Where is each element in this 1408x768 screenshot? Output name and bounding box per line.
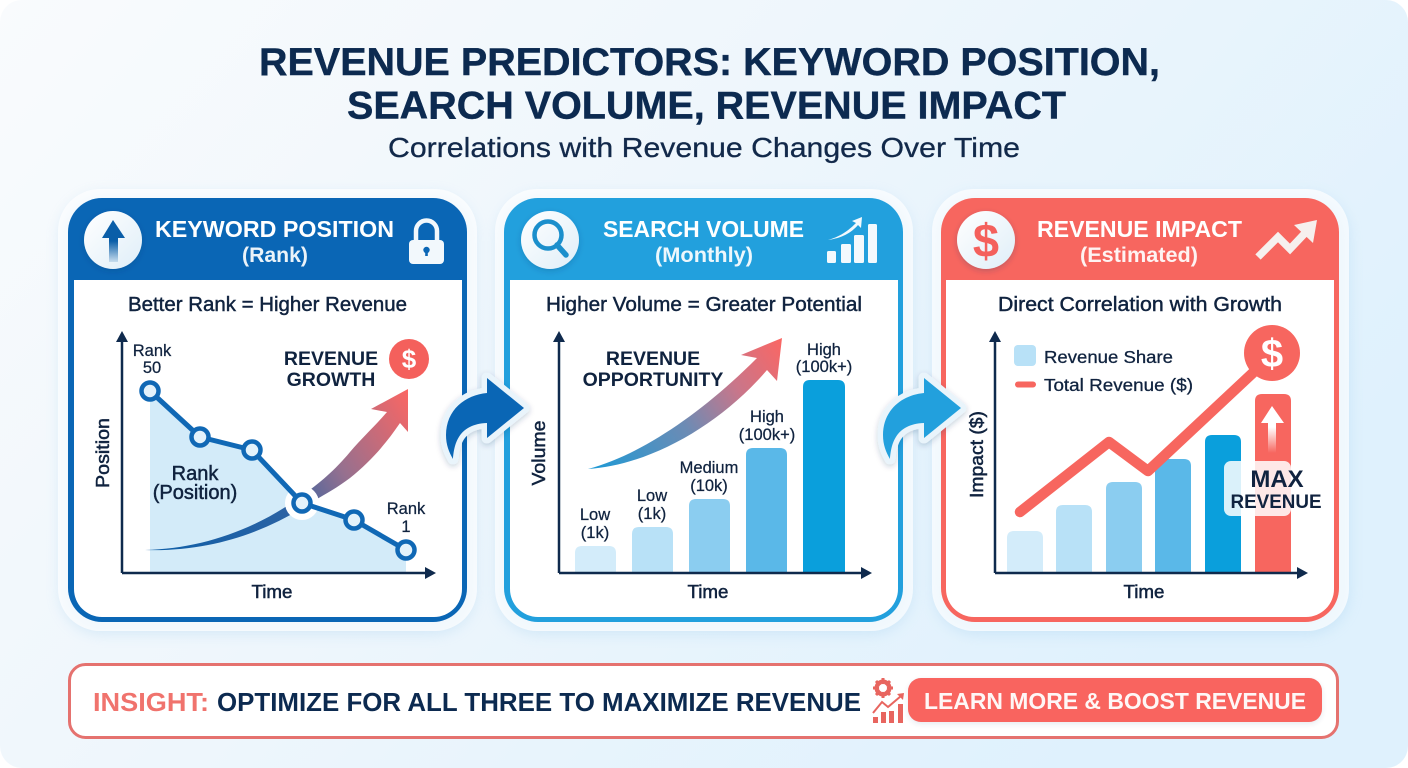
legend bbox=[1014, 345, 1193, 395]
label: rank 1: 1 bbox=[401, 518, 411, 536]
heading: search volume: SEARCH VOLUME bbox=[603, 216, 804, 242]
axis label: time: Time bbox=[252, 582, 292, 602]
callout: max revenue: REVENUE bbox=[1230, 492, 1322, 513]
axis label: time: Time bbox=[1124, 582, 1164, 602]
bar chart: revenue share bbox=[989, 331, 1308, 579]
panel statement: Better Rank = Higher Revenue bbox=[128, 294, 407, 316]
axis label: impact: Impact ($) bbox=[967, 411, 987, 498]
axis label: position: Position bbox=[93, 418, 113, 488]
icon: dollar coin: $ bbox=[1261, 332, 1283, 376]
legend: Total Revenue ($) bbox=[1044, 375, 1193, 395]
axis label: volume: Volume bbox=[529, 420, 549, 486]
panel: keyword position bbox=[58, 189, 477, 634]
bar label 2: Low bbox=[637, 487, 667, 505]
heading: revenue impact: (Estimated) bbox=[1080, 244, 1198, 267]
panel statement: Direct Correlation with Growth bbox=[998, 294, 1282, 316]
insight text: INSIGHT: bbox=[93, 689, 209, 717]
icon: trend arrow bbox=[1258, 220, 1317, 257]
bar label 4: (100k+) bbox=[739, 426, 795, 444]
heading: revenue impact bbox=[1037, 216, 1242, 267]
icon: gear and growth chart bbox=[873, 678, 904, 723]
label: rank 1: Rank bbox=[387, 500, 426, 518]
callout: max revenue: MAX bbox=[1250, 466, 1304, 493]
title bbox=[259, 41, 1160, 128]
arrow: revenue opportunity bbox=[588, 338, 782, 469]
label: rank position: (Position) bbox=[153, 482, 237, 504]
panel statement: Higher Volume = Greater Potential bbox=[546, 294, 862, 316]
heading: search volume bbox=[603, 216, 804, 267]
panel: search volume bbox=[495, 189, 913, 634]
bar label 5: (100k+) bbox=[796, 358, 852, 376]
arrow: volume to impact bbox=[883, 378, 961, 459]
heading: keyword position bbox=[155, 216, 394, 267]
bar label 2: (1k) bbox=[638, 505, 666, 523]
title: REVENUE PREDICTORS: KEYWORD POSITION, bbox=[259, 41, 1160, 84]
bar label 3: Medium bbox=[680, 459, 738, 477]
heading: revenue impact: REVENUE IMPACT bbox=[1037, 216, 1242, 242]
panel: revenue impact bbox=[932, 189, 1349, 634]
label: revenue opportunity: OPPORTUNITY bbox=[583, 369, 723, 391]
label: revenue opportunity: REVENUE bbox=[606, 348, 700, 370]
legend: Revenue Share bbox=[1044, 347, 1173, 367]
axes bbox=[995, 340, 1300, 573]
axes bbox=[122, 340, 428, 573]
line: total revenue bbox=[1020, 355, 1272, 512]
icon: magnifier badge bbox=[521, 211, 579, 269]
insight banner bbox=[70, 664, 1338, 738]
insight text: OPTIMIZE FOR ALL THREE TO MAXIMIZE REVENUE bbox=[217, 689, 861, 717]
axes bbox=[559, 340, 864, 573]
line chart: rank over time bbox=[116, 331, 436, 579]
callout: max revenue bbox=[1224, 461, 1322, 516]
button: learn more: LEARN MORE & BOOST REVENUE bbox=[924, 688, 1306, 714]
label: revenue growth: GROWTH bbox=[287, 369, 375, 391]
bar label 3: (10k) bbox=[690, 477, 728, 495]
heading: keyword position: KEYWORD POSITION bbox=[155, 216, 394, 242]
icon: dollar coin bbox=[1244, 325, 1300, 381]
axis label: time: Time bbox=[688, 582, 728, 602]
arrow: position to volume bbox=[446, 378, 524, 459]
icon: dollar badge bbox=[957, 211, 1015, 269]
heading: search volume: (Monthly) bbox=[655, 244, 753, 267]
icon: lock bbox=[409, 220, 444, 264]
label: rank position: Rank bbox=[172, 463, 219, 485]
bar label 4: High bbox=[750, 408, 784, 426]
bar label 5: High bbox=[807, 341, 841, 359]
icon: bar growth bbox=[827, 217, 877, 263]
icon: dollar coin: $ bbox=[402, 344, 417, 374]
bar label 1: (1k) bbox=[581, 524, 609, 542]
arrow: revenue growth bbox=[145, 389, 408, 550]
label: rank 50: 50 bbox=[143, 359, 161, 377]
data points bbox=[142, 382, 414, 558]
subtitle: Correlations with Revenue Changes Over Time bbox=[388, 132, 1020, 163]
icon: dollar badge: $ bbox=[973, 214, 999, 267]
bar label 1: Low bbox=[580, 506, 610, 524]
title: SEARCH VOLUME, REVENUE IMPACT bbox=[347, 84, 1066, 128]
icon: dollar coin bbox=[389, 339, 429, 379]
max revenue bar bbox=[1255, 394, 1291, 573]
heading: keyword position: (Rank) bbox=[242, 244, 308, 267]
label: rank 50: Rank bbox=[133, 342, 172, 360]
icon: up arrow badge bbox=[84, 211, 142, 269]
label: revenue growth: REVENUE bbox=[284, 348, 378, 370]
button: learn more bbox=[908, 678, 1322, 722]
white up arrow bbox=[1261, 406, 1284, 453]
bar chart: search volume bbox=[553, 331, 872, 579]
